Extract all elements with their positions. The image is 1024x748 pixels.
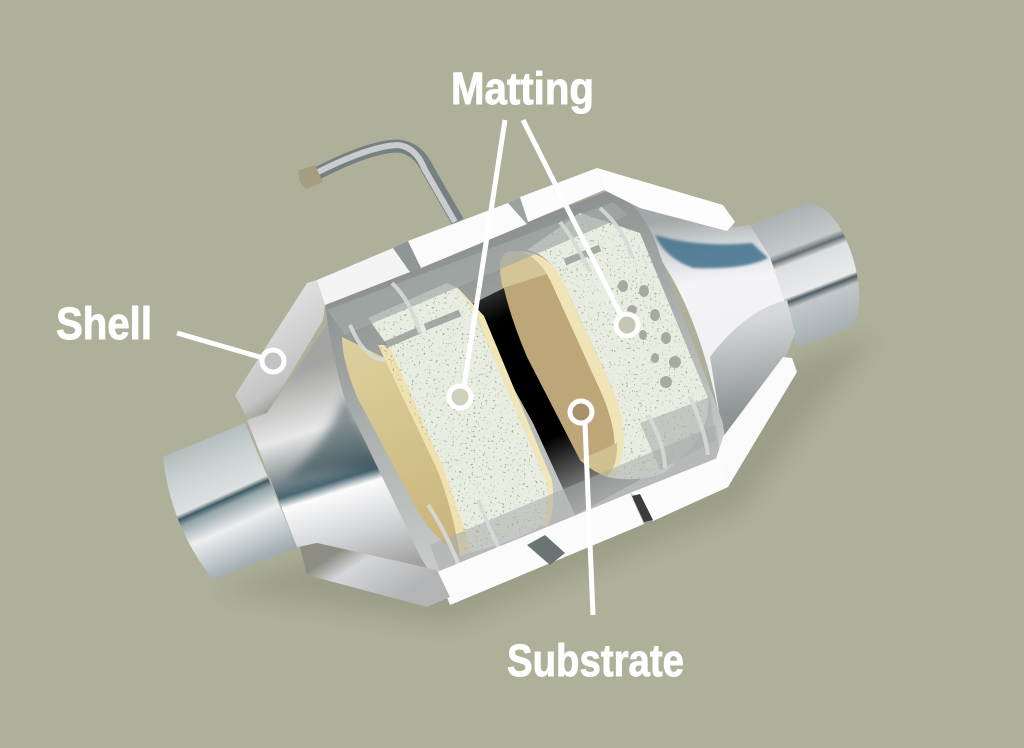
oxygen sensor tube xyxy=(298,145,458,222)
glass bands over cylinder xyxy=(327,202,720,572)
central cylinder xyxy=(325,190,725,580)
left pipe xyxy=(163,423,297,580)
label: Shell xyxy=(56,298,284,372)
label: Substrate: Substrate xyxy=(507,635,684,686)
cone highlight xyxy=(655,235,768,268)
shell: left lower xyxy=(300,543,450,607)
dark interior xyxy=(468,270,640,515)
right pipe xyxy=(750,203,859,347)
label: Matting: Matting xyxy=(451,63,594,114)
matting and substrate: right xyxy=(500,210,715,485)
left cone xyxy=(247,320,433,570)
right cone xyxy=(610,190,795,437)
shell: top plates xyxy=(317,168,735,305)
label: Matting xyxy=(449,63,638,408)
shell: left upper xyxy=(235,280,325,418)
label: Substrate xyxy=(507,401,684,686)
label: Shell: Shell xyxy=(56,298,152,349)
drop shadow xyxy=(215,335,875,625)
shell: right lower xyxy=(715,357,797,487)
perforation holes xyxy=(618,280,681,388)
right cone lower reflection xyxy=(710,300,795,437)
left cone shadow xyxy=(285,395,385,480)
diagram: catalytic converter cutaway xyxy=(56,70,860,677)
shell: bottom plates xyxy=(437,457,728,605)
matting and substrate: left xyxy=(342,280,560,560)
